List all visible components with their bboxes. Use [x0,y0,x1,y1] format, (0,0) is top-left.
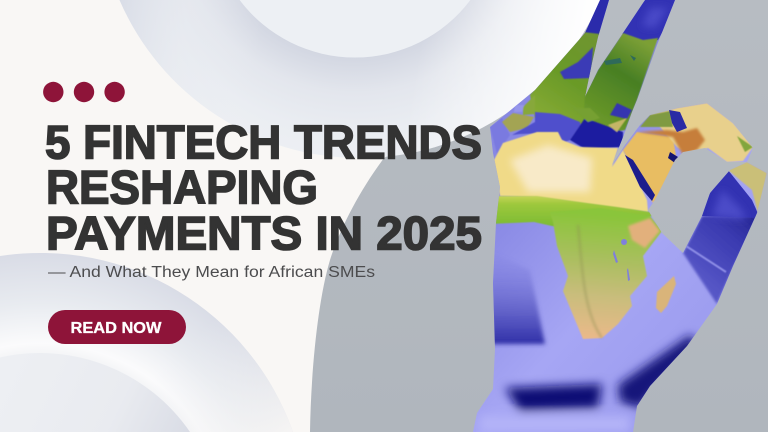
decorative large top circle [120,0,600,158]
Black sea [610,103,632,119]
Sahara desert [494,132,648,212]
thumb [683,216,760,304]
grey curved panel [310,0,768,432]
title [45,116,482,260]
fingertips in ocean blue [583,0,609,35]
Red Sea [625,155,655,201]
read now button: READ NOW [70,320,162,337]
Africa body fold [578,225,602,338]
thumb crease [686,246,726,272]
Horn of Africa [628,218,660,248]
Sahara pale centre [510,145,592,192]
Baltic sea [560,47,593,79]
decorative bottom-left circle [0,253,293,432]
thumb tip land [728,162,767,213]
title: 5 FINTECH TRENDS [45,116,482,168]
hand shadows [480,335,700,432]
curled index finger desert [650,103,753,162]
palm left shading [493,266,548,348]
southern Africa [550,208,662,339]
title: PAYMENTS IN 2025 [46,206,482,260]
Persian Gulf [668,152,678,163]
index knuckle green [640,111,673,127]
Mediterranean sea [512,108,627,149]
upper thumb ocean [700,170,760,218]
Iberia and France [502,95,535,132]
Caspian sea [669,110,687,132]
decorative dots [43,82,125,102]
sub-Saharan green belt [496,195,652,227]
Europe green on fingers [530,32,600,125]
small northern seas [604,55,636,65]
read now button [48,310,186,344]
Atlantic [490,118,510,154]
hand base colour [470,0,768,432]
subtitle: — And What They Mean for African SMEs [48,264,375,281]
Madagascar [656,276,676,313]
title: RESHAPING [46,160,318,214]
illustration: hand painted with world map [470,0,768,432]
index orange band [637,128,705,155]
African lakes [613,239,630,281]
fingertip green [737,136,753,152]
Arabia [623,132,677,203]
